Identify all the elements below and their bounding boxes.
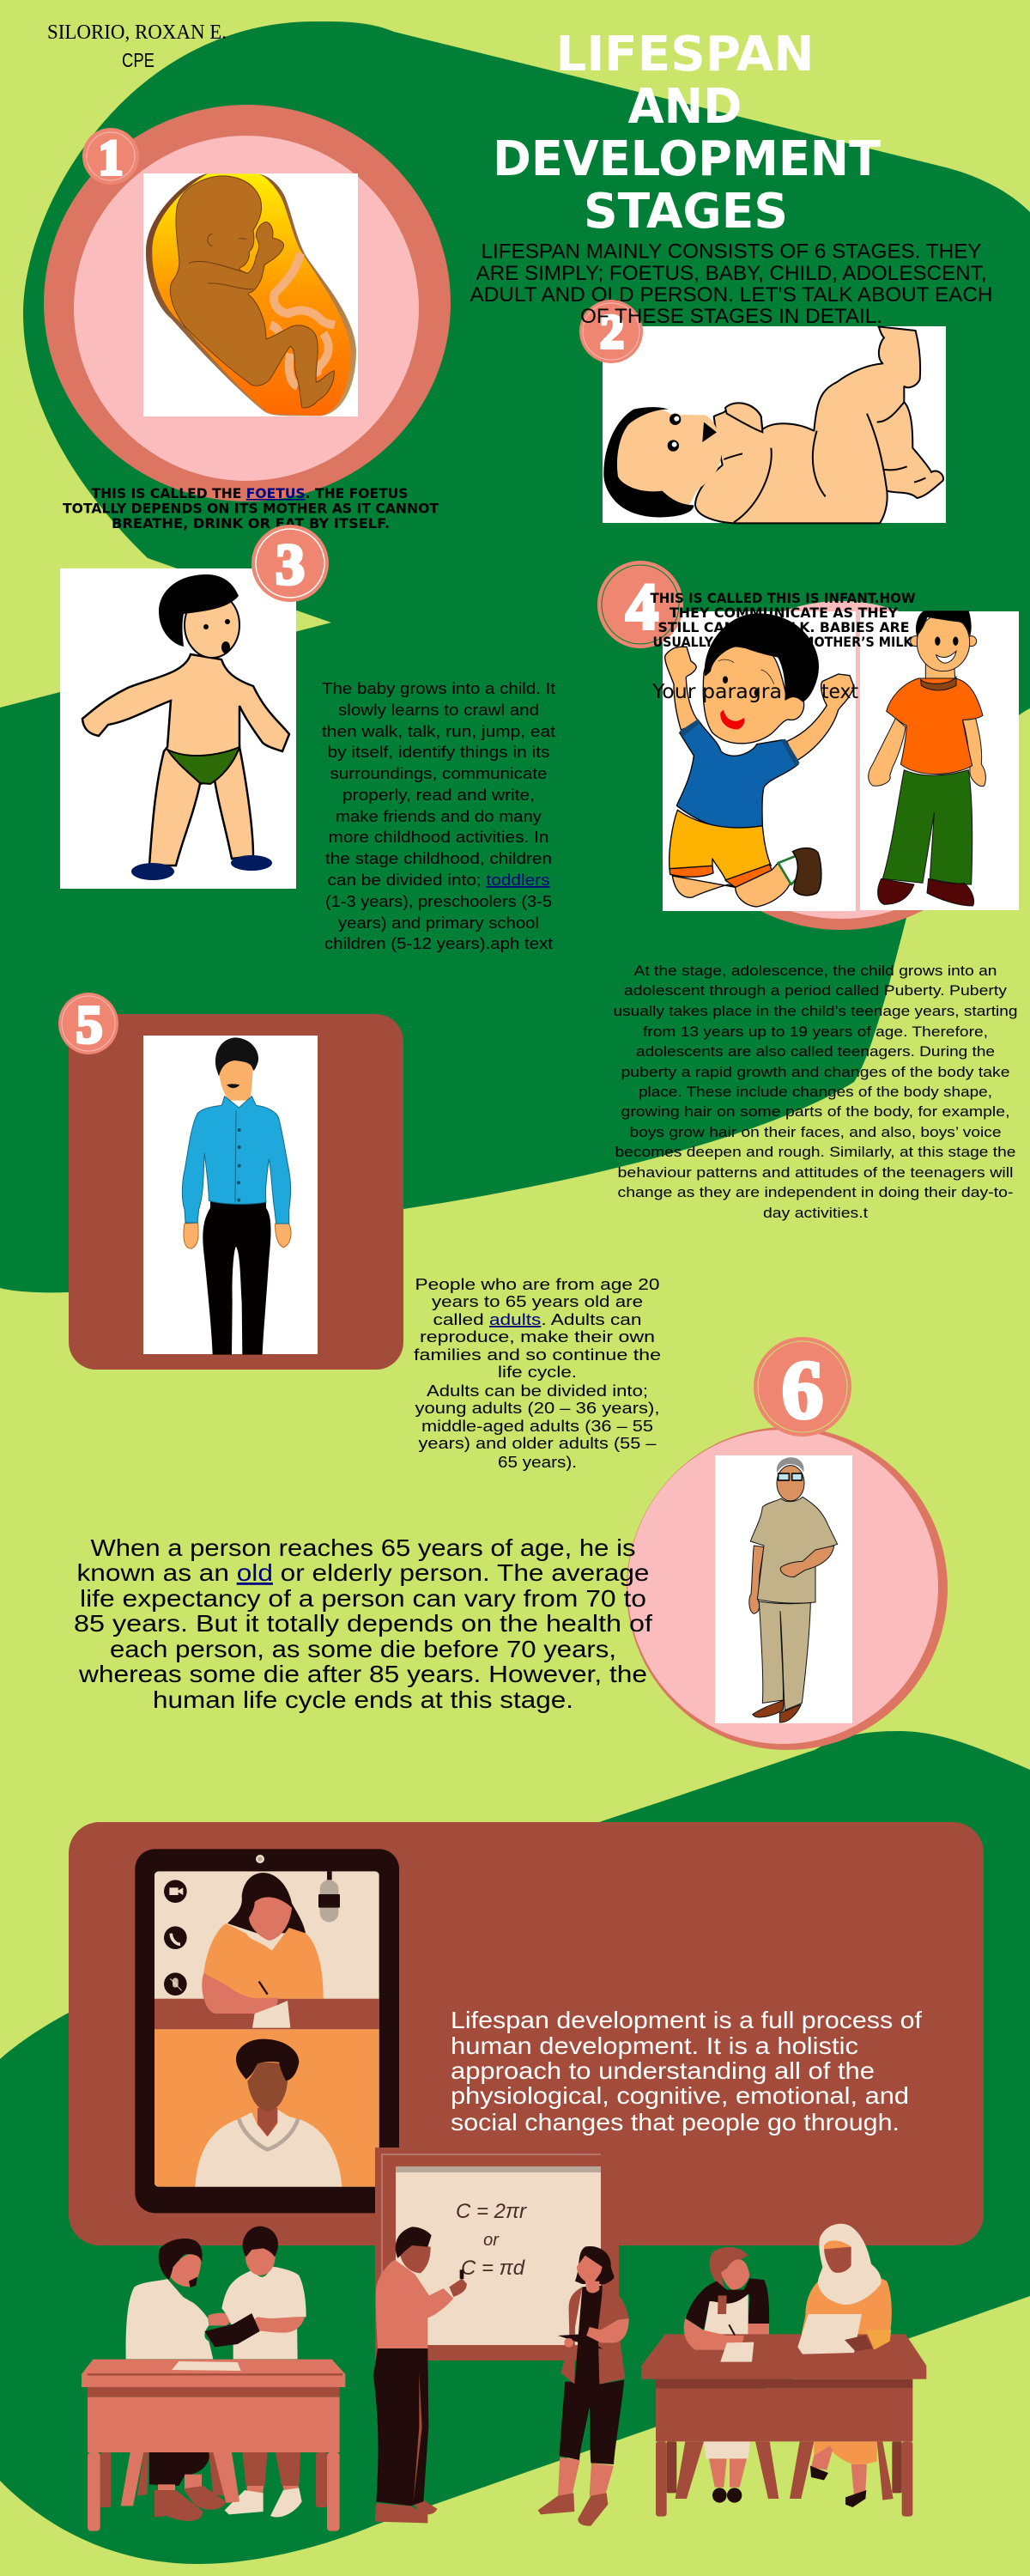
title: LIFESPAN [556,27,814,82]
icon: foetus illustration [146,173,356,416]
intro text [470,240,992,307]
adolescence text: growing hair on some parts of the body, for example, [621,1103,1009,1120]
panel: stage 4 adolescent [663,601,1019,930]
placeholder paragraph text [651,681,858,703]
title [493,27,881,240]
badge 3 [251,525,329,602]
adulthood text: People who are from age 20 [415,1276,659,1293]
childhood text: The baby grows into a child. It [322,680,555,697]
book [204,2313,260,2347]
summary text [451,2007,922,2136]
badge 5: 5 [76,996,103,1054]
whiteboard: or [483,2231,500,2250]
adolescence text: At the stage, adolescence, the child grows into an [633,963,997,979]
stage 2 caption: THEY COMMUNICATE AS THEY [670,605,898,621]
icon: child illustration [60,568,296,889]
panel: stage 6 old person [627,1427,948,1750]
panel: stage 1 foetus [44,105,451,501]
icon: woman on screen [202,1873,324,2028]
adolescence text: becomes deepen and rough. Similarly, at this stage the [615,1144,1016,1160]
old age text: known as an old or elderly person. The average [77,1559,649,1586]
lower green background shape [0,1731,1030,2564]
adulthood text: years to 65 years old are [432,1293,643,1310]
intro text last line: OF THESE STAGES IN DETAIL. [580,305,882,328]
stage 2 caption: USUALLY TAKE THEIR MOTHER’S MILK [652,634,913,650]
badge 6 [754,1337,851,1437]
badge 2: 2 [600,306,624,359]
whiteboard: C = πd [461,2257,525,2280]
man with beard [126,2239,236,2521]
childhood text: then walk, talk, run, jump, eat [322,723,555,740]
adolescence text: from 13 years up to 19 years of age. Therefore, [643,1024,988,1040]
badge 6: 6 [781,1344,824,1437]
adolescence text: puberty a rapid growth and changes of the body take [621,1064,1009,1080]
adulthood text: reproduce, make their own [420,1328,655,1346]
childhood text: (1-3 years), preschoolers (3-5 [325,893,552,910]
adulthood text: life cycle. [498,1364,577,1381]
icon: teenager illustration [869,611,985,906]
icon: jumping boy illustration [665,614,854,907]
old age text: whereas some die after 85 years. However, the [78,1661,647,1687]
adulthood text: years) and older adults (55 – [419,1435,656,1452]
old age text: When a person reaches 65 years of age, he is [91,1534,636,1561]
people at left desk [82,2227,345,2531]
woman with braid [686,2247,769,2503]
badge 1 [82,128,139,185]
woman in hijab [801,2224,892,2507]
people at right desk [641,2224,926,2517]
panel: summary [69,1822,984,2245]
stage 2 caption [651,590,916,650]
author name: CPE [122,49,154,71]
adolescence text: adolescent through a period called Puberty. Puberty [624,982,1008,999]
stage 1 caption: THIS IS CALLED THE FOETUS. THE FOETUS [91,485,409,501]
stage 2 caption: STILL CANNOT TALK. BABIES ARE [657,619,910,635]
summary text: social changes that people go through. [451,2109,900,2136]
icon: man on screen [195,2039,342,2187]
badge 3: 3 [276,532,305,597]
adulthood text [414,1276,661,1471]
adulthood text: families and so continue the [414,1346,661,1364]
childhood text: years) and primary school [338,914,539,932]
teacher at whiteboard [373,2227,467,2523]
intro text: ADULT AND OLD PERSON. LET’S TALK ABOUT EACH [470,283,992,307]
childhood text: more childhood activities. In [328,829,549,846]
icon: old man illustration [749,1457,838,1722]
title: AND [628,79,742,135]
icon: baby illustration [603,326,946,523]
left desk [82,2360,345,2531]
childhood text: children (5-12 years).aph text [324,935,553,952]
author name: SILORIO, ROXAN E. [47,21,227,44]
icon: video call tablet [135,1849,399,2213]
right desk [641,2314,926,2517]
childhood text [322,680,555,952]
childhood text: can be divided into; toddlers [328,872,549,889]
title: STAGES [584,184,788,240]
adolescence text: change as they are independent in doing their day-to- [618,1184,1013,1200]
upper green background shape [0,21,1030,1292]
author name [47,21,227,71]
summary text: human development. It is a holistic [451,2032,858,2059]
intro text: ARE SIMPLY; FOETUS, BABY, CHILD, ADOLESCENT, [476,262,987,285]
childhood text: surroundings, communicate [330,765,548,782]
adulthood text: middle-aged adults (36 – 55 [421,1418,653,1435]
summary text: Lifespan development is a full process of [451,2007,922,2033]
adolescence text: boys grow hair on their faces, and also, boys’ voice [630,1124,1001,1140]
childhood text: by itself, identify things in its [328,744,549,761]
adulthood text: 65 years). [498,1454,577,1471]
stage 1 caption: BREATHE, DRINK OR EAT BY ITSELF. [112,515,390,532]
whiteboard: C = 2πr [456,2200,527,2223]
placeholder paragraph text: text [821,681,858,703]
stage 1 caption [63,485,439,532]
icon: adult man illustration [182,1037,291,1355]
old age text: human life cycle ends at this stage. [153,1686,573,1713]
adolescence text: day activities.t [763,1205,868,1221]
student in white [221,2227,306,2517]
panel: stage 5 adult [69,1014,403,1370]
childhood text: make friends and do many [336,808,542,825]
summary text: approach to understanding all of the [451,2057,875,2084]
childhood text: slowly learns to crawl and [338,702,539,719]
adolescence text [613,963,1018,1221]
old age text: life expectancy of a person can vary from 70 to [80,1585,646,1612]
whiteboard [375,2148,619,2360]
placeholder paragraph text: Your paragra [651,681,782,703]
adolescence text: usually takes place in the child’s teenage years, starting [613,1003,1018,1019]
stage 1 caption: TOTALLY DEPENDS ON ITS MOTHER AS IT CANNOT [63,500,439,517]
woman with tablet [538,2246,629,2526]
childhood text: properly, read and write, [342,787,535,804]
badge 5 [58,993,118,1054]
summary text: physiological, cognitive, emotional, and [451,2082,909,2109]
adolescence text: adolescents are also called teenagers. During the [636,1043,995,1060]
intro text: LIFESPAN MAINLY CONSISTS OF 6 STAGES. THEY [481,240,982,263]
old age text: each person, as some die before 70 years, [110,1636,616,1662]
title: DEVELOPMENT [493,131,881,187]
adulthood text: young adults (20 – 36 years), [415,1400,659,1417]
badge 1: 1 [98,130,124,185]
stage 2 caption: THIS IS CALLED THIS IS INFANT.HOW [651,590,916,606]
adolescence text: place. These include changes of the body shape, [639,1084,992,1100]
old age text: 85 years. But it totally depends on the health of [74,1610,652,1637]
adulthood text: Adults can be divided into; [427,1382,648,1400]
badge 4 [597,561,683,648]
badge 2 [579,300,643,363]
badge 4: 4 [626,571,658,643]
adulthood text: called adults . Adults can [433,1311,642,1328]
adolescence text: behaviour patterns and attitudes of the teenagers will [618,1164,1013,1181]
old age text [74,1534,652,1713]
childhood text: the stage childhood, children [325,850,552,867]
